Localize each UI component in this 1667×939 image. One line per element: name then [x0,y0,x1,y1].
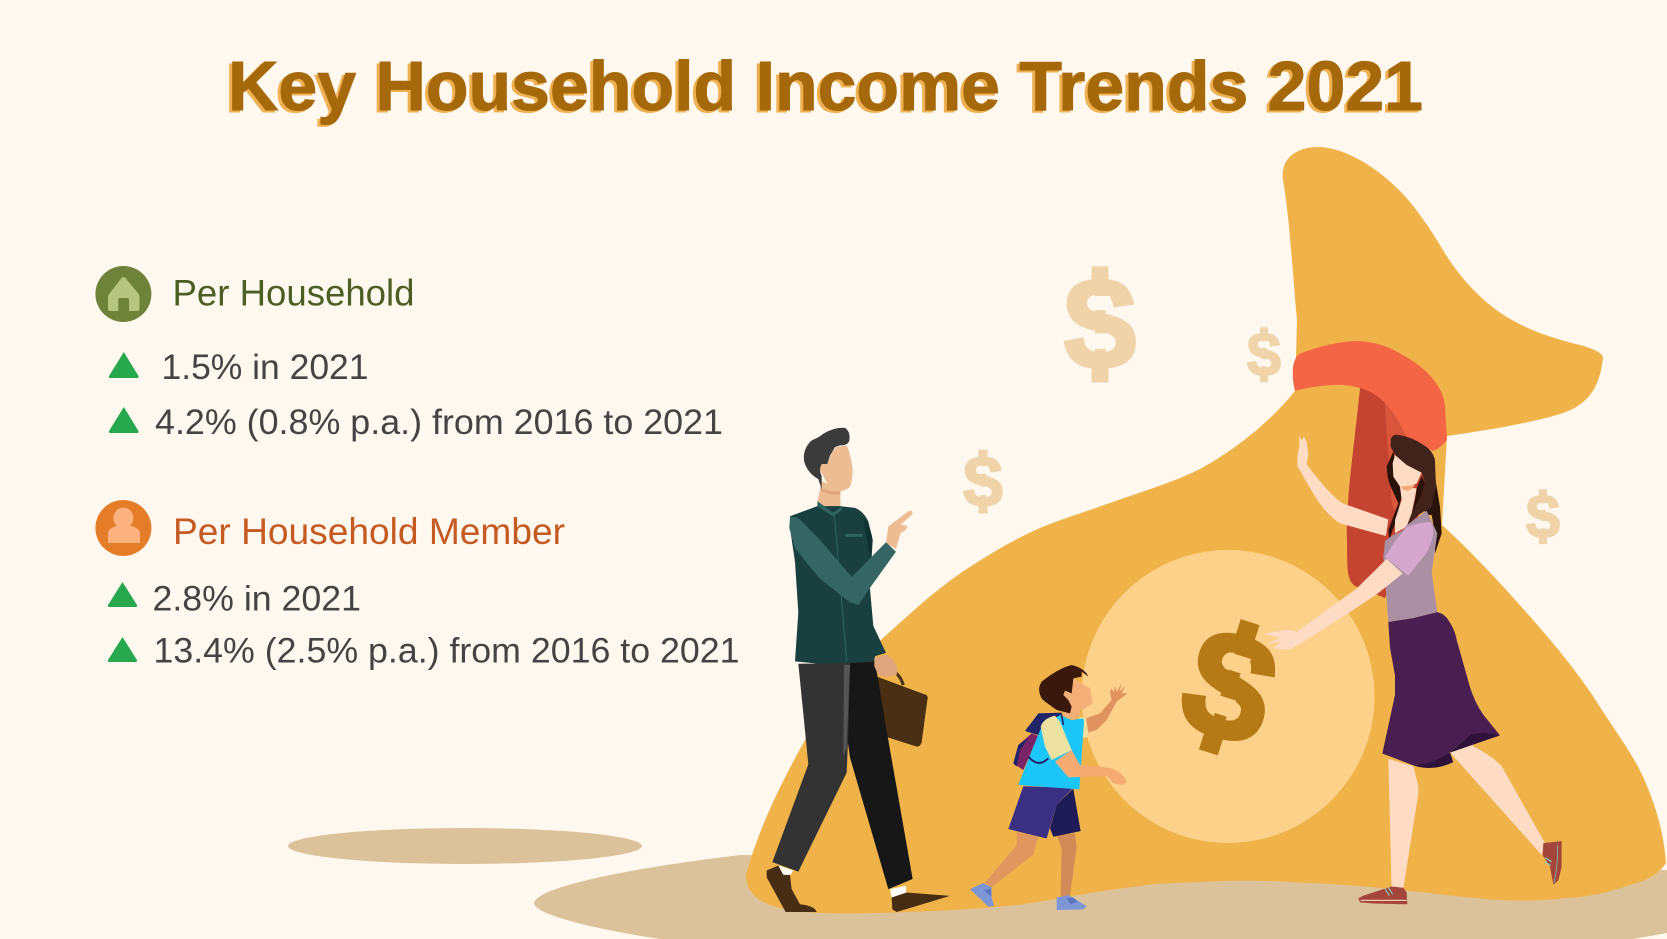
stat: 2.8% in 2021: 2.8% in 2021 [152,580,361,619]
icon: up arrow [108,582,137,607]
ground shadow ellipse [288,828,642,864]
figure: woman [1263,435,1562,904]
head and hair [1387,435,1442,553]
stat: 1.5% in 2021: 1.5% in 2021 [162,348,368,387]
icon: up arrow [109,352,139,378]
bag cuff [1293,341,1447,451]
dress and limbs [1263,511,1562,904]
heading: per household member: Per Household Member [173,511,565,552]
faint dollar sign: $ [1526,482,1560,550]
icon: house [95,266,151,322]
icon: up arrow [108,637,137,662]
title: Key Household Income Trends 2021 [228,47,1423,125]
money bag [746,147,1666,913]
stat: 13.4% from 2016 to 2021: 13.4% (2.5% p.a.) from 2016 to 2021 [154,632,740,671]
faint dollar sign: $ [1064,252,1136,396]
faint dollar sign: $ [963,443,1003,522]
ground [534,855,1667,939]
icon: person [95,500,151,556]
faint dollar sign: $ [1247,320,1281,388]
figure: man [767,428,950,912]
stat: 4.2% from 2016 to 2021: 4.2% (0.8% p.a.) from 2016 to 2021 [155,403,723,442]
coin dollar sign: $ [1163,593,1296,781]
panel: per household member [95,500,739,671]
icon: up arrow [109,407,139,433]
bag tongue [1347,380,1430,598]
figure: child [970,665,1128,910]
coin [1082,550,1374,843]
panel: per household [95,266,723,442]
raised arm [1297,435,1388,536]
heading: per household: Per Household [172,273,414,314]
